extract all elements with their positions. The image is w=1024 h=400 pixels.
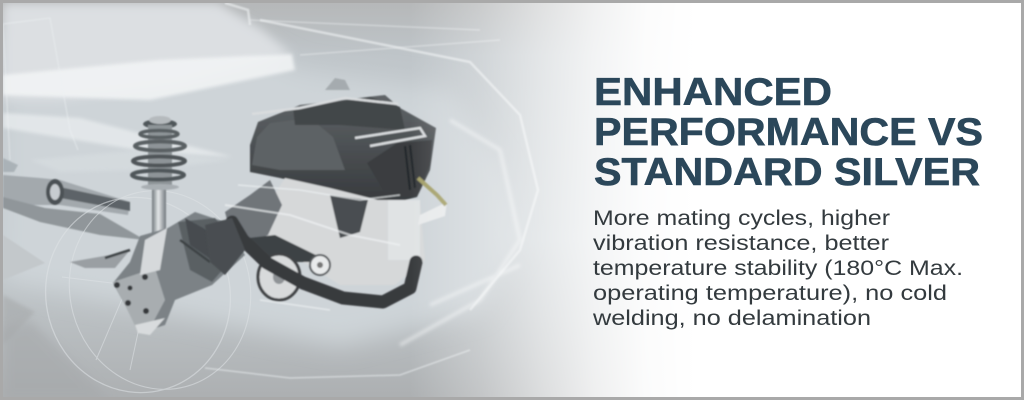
- body text: welding, no delamination: [592, 307, 871, 330]
- body text: temperature stability (180°C Max.: [593, 257, 963, 280]
- body text: operating temperature), no cold: [593, 282, 947, 305]
- body text: vibration resistance, better: [593, 232, 889, 255]
- exhaust and drive shaft: [3, 158, 145, 240]
- heading: ENHANCED: [594, 71, 832, 114]
- suspension strut and spring: [132, 116, 185, 236]
- heading: STANDARD SILVER: [594, 151, 980, 194]
- heading: PERFORMANCE VS: [594, 111, 983, 154]
- body text: [592, 207, 963, 330]
- wheel hub and brake assembly: [70, 212, 245, 335]
- engine: [205, 78, 447, 310]
- heading: [594, 71, 983, 194]
- ghost car body: [3, 3, 538, 400]
- front wheel outline: [24, 170, 273, 400]
- body text: More mating cycles, higher: [593, 207, 890, 230]
